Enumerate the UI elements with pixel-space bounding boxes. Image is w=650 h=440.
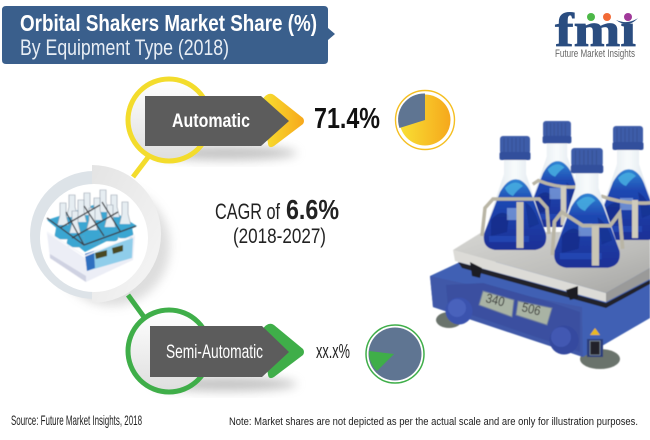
connector: green [128, 295, 144, 317]
yellow chevron [262, 94, 304, 147]
illustration: orbital shaker with flasks [430, 121, 650, 369]
panel: Automatic [128, 79, 304, 161]
illustration: small orbital shaker [47, 190, 137, 282]
pie chart: Semi-Automatic share [366, 325, 424, 383]
flask front centre [552, 148, 623, 268]
CAGR text: (2018-2027) [233, 225, 326, 248]
panel: central shaker badge [30, 165, 170, 306]
source: Source: Future Market Insights, 2018 [11, 412, 142, 428]
green ring [128, 310, 210, 392]
display readouts [479, 290, 552, 325]
flask front left [482, 136, 549, 250]
green chevron [262, 324, 304, 378]
CAGR text: CAGR of [215, 199, 281, 224]
flask back centre [532, 120, 576, 228]
yellow ring [128, 79, 210, 161]
label arrow [145, 96, 289, 146]
title banner [2, 6, 335, 64]
value: xx.x%: xx.x% [316, 341, 350, 363]
label arrow [150, 326, 289, 377]
flask right [597, 126, 650, 240]
title line 1: Orbital Shakers Market Share (%) [20, 10, 317, 36]
connector: yellow [133, 156, 149, 177]
power switch [587, 328, 603, 357]
display readouts: 340 [484, 290, 506, 310]
label text: Automatic [172, 111, 250, 132]
CAGR text [215, 194, 339, 248]
logo: Future Market Insights: fmi [555, 4, 636, 57]
value: 71.4%: 71.4% [314, 103, 380, 135]
silver plate [453, 232, 650, 308]
panel: Semi-Automatic [128, 310, 304, 392]
shaker base [430, 262, 650, 369]
pie chart: Automatic share [396, 90, 454, 150]
label text: Semi-Automatic [166, 342, 263, 363]
CAGR text: 6.6% [286, 194, 339, 225]
display readouts: 506 [520, 299, 542, 319]
title line 2: By Equipment Type (2018) [20, 35, 229, 60]
